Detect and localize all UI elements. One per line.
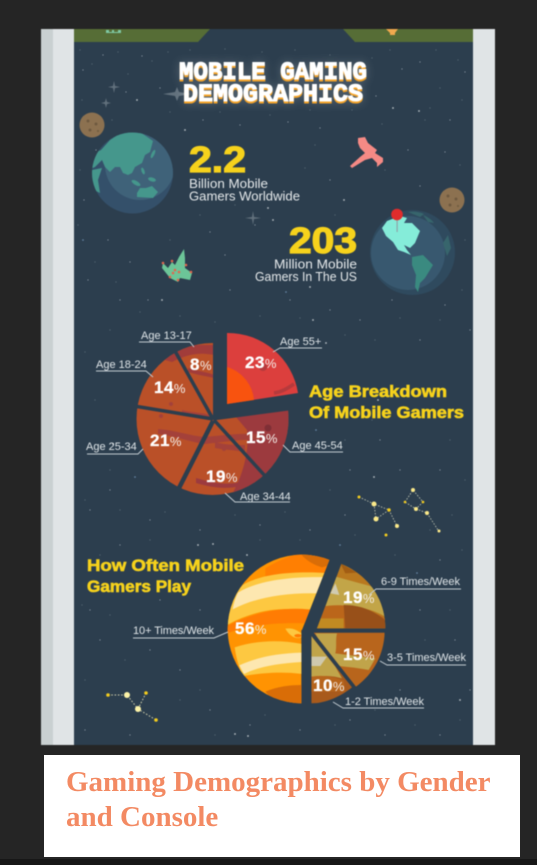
chart: how often pie: 15% [343,645,375,664]
chart: how often pie: 19% [343,588,375,607]
planet slices [136,342,290,496]
caption text: Gaming Demographics by Gender [66,766,491,798]
chart: age breakdown pie: Age 45-54 [292,440,343,452]
bottom edge strip [0,859,537,865]
slice: 3-5 times per week [312,632,387,688]
stat: 203 million: Million Mobile [274,258,357,272]
chart: age breakdown pie: Age 25-34 [86,441,137,453]
heading: how often: Gamers Play [87,578,192,596]
gaps between slices [134,351,266,490]
icon: asteroid left [80,112,104,138]
heading: how often [87,557,244,596]
slice: Age 55+ [227,333,298,404]
slice: 1-2 times per week [310,635,354,705]
chart: age breakdown pie: Age 34-44 [240,491,291,503]
percent labels: 23% [245,353,277,372]
chart: how often pie: 3-5 Times/Week [387,652,466,664]
chart: how often pie: 10% [313,676,345,695]
chart: how often pie: 1-2 Times/Week [345,696,424,708]
star field [78,49,470,736]
icon: globe Americas with pin [370,209,455,295]
chart: age breakdown pie [86,330,343,505]
slice: 6-9 times per week [315,560,387,630]
chart: age breakdown pie: 8% [190,355,212,374]
green header strips [74,29,473,42]
gap cutout [213,330,300,420]
planet slices [222,550,387,710]
stat: 2.2 billion: Gamers Worldwide [189,190,300,204]
caption text: and Console [66,801,218,833]
panel frame: left and right margins [41,29,495,745]
callout labels: 10+ Times/Week [133,625,214,637]
slice: 10+ times per week [226,554,330,704]
percent labels: 56% [235,619,267,638]
title [179,58,367,109]
chart: age breakdown pie: 21% [150,431,182,450]
heading: age breakdown [309,383,464,422]
heading: age breakdown: Of Mobile Gamers [309,404,464,422]
icon: pink spaceship [350,137,383,168]
chart: age breakdown pie: Age 55+ [280,336,321,348]
icon: constellation lower [106,691,158,722]
chart: age breakdown pie: 14% [154,378,186,397]
title: DEMOGRAPHICS [183,80,363,109]
stat: 203 million: 203 [289,220,357,261]
stat: 203 million: Gamers In The US [255,270,357,284]
infographic panel [41,29,495,745]
icon: constellation upper [358,488,440,536]
chart: how often pie: 6-9 Times/Week [381,576,460,588]
chart: age breakdown pie: 15% [246,428,278,447]
stat: 2.2 billion: Billion Mobile [189,177,268,191]
space background [74,29,473,745]
callout labels: Age 13-17 [141,330,192,342]
title: MOBILE GAMING [179,58,367,87]
icon: green spaceship [162,249,192,282]
sparkle stars [101,81,261,225]
chart: age breakdown pie: 19% [206,467,238,486]
stat: 2.2 billion: 2.2 [189,139,246,180]
heading: age breakdown: Age Breakdown [309,383,447,401]
icon: globe Asia [88,130,175,214]
chart: age breakdown pie: Age 18-24 [96,359,147,371]
chart: how often pie [133,550,466,710]
heading: how often: How Often Mobile [87,557,244,575]
stat: 2.2 billion [189,139,300,204]
stat: 203 million [255,220,357,284]
caption box [44,755,520,857]
icon: asteroid right [440,188,464,212]
